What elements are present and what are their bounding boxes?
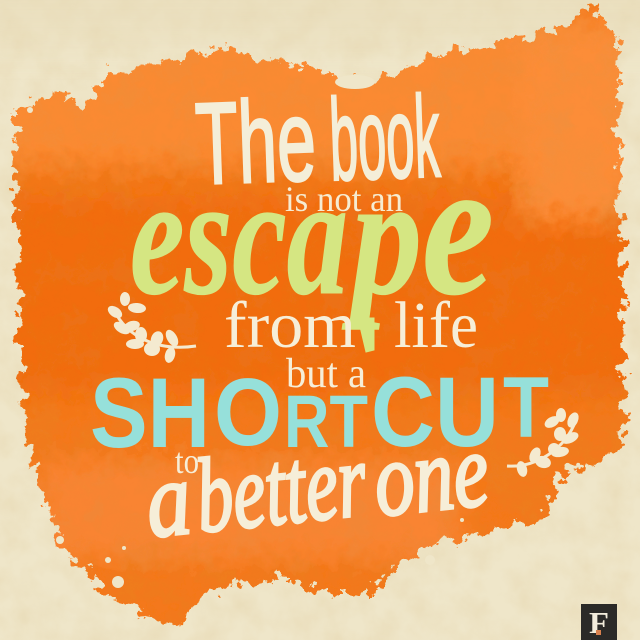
- line: from life: life: [394, 289, 478, 362]
- logo badge: F: [589, 605, 609, 640]
- icon: left laurel sprig: [106, 292, 196, 364]
- word: SHORTCUT: RT: [284, 380, 368, 463]
- line: The book: The: [193, 75, 318, 209]
- word: escape: e: [422, 119, 494, 336]
- word: escape: [130, 119, 494, 352]
- line: is not an: is not an: [285, 179, 403, 219]
- icon: right laurel sprig: [507, 408, 581, 478]
- word: SHORTCUT: [90, 356, 549, 468]
- word: to: to: [175, 441, 199, 481]
- word: escape: esca: [130, 142, 348, 330]
- logo badge: [581, 604, 617, 640]
- line: from life: [224, 289, 478, 362]
- quote text: [90, 71, 549, 560]
- quote text: book: [327, 71, 442, 205]
- word: SHORTCUT: CU: [371, 356, 499, 467]
- paint gaps and splatter: [27, 75, 464, 588]
- line: a better one: [140, 411, 494, 560]
- line: a better one: better: [190, 421, 372, 555]
- word: SHORTCUT: T: [503, 360, 549, 456]
- line: a better one: one: [368, 411, 494, 539]
- line: but a: but a: [286, 351, 366, 397]
- word: SHORTCUT: O: [214, 359, 282, 466]
- line: from life: from: [224, 289, 356, 362]
- line: a better one: a: [140, 439, 196, 560]
- word: escape: p: [341, 142, 422, 330]
- word: SHORTCUT: SH: [90, 357, 210, 468]
